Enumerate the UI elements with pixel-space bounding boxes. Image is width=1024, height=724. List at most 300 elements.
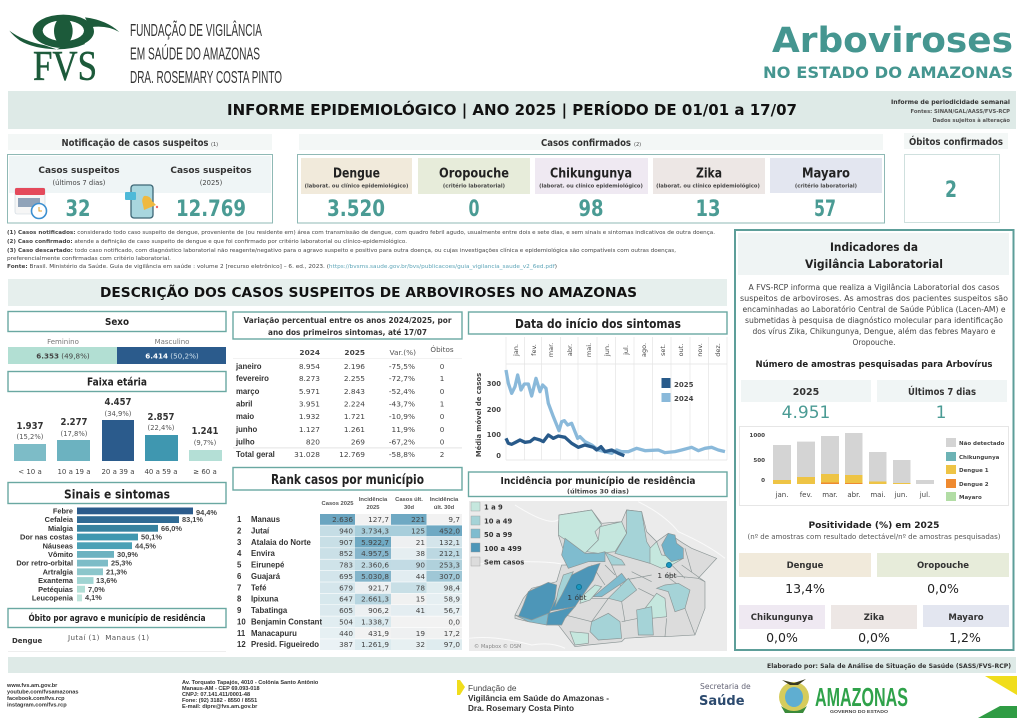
table: variação percentual: Var.(%): [389, 348, 416, 357]
table: rank casos por município: Rank casos por município: [271, 473, 424, 488]
table: variação percentual: 0: [440, 387, 445, 396]
card: Zika: [653, 158, 765, 222]
panel: notificação de casos suspeitos: (2025): [200, 179, 223, 187]
logo: FVS: FVS: [33, 44, 97, 90]
panel: sexo: Masculino: [155, 338, 189, 346]
table: variação percentual: Total geral: [236, 450, 275, 459]
panel: notificação de casos suspeitos: [8, 134, 272, 223]
kpi: amostras 2025: [741, 380, 871, 423]
table: rank casos por município: 921,7: [368, 583, 389, 592]
legend: years: 2025: [674, 381, 694, 389]
bar chart: sinais e sintomas: 30,9%: [117, 550, 138, 559]
table: variação percentual: 0: [440, 438, 445, 446]
card: Dengue: Dengue: [333, 166, 380, 182]
table: rank casos por município: 8: [237, 595, 242, 604]
footer: links: [6, 683, 78, 708]
legend: incidence: 100 a 499: [484, 545, 522, 553]
bar chart: sinais e sintomas: 83,1%: [182, 515, 203, 524]
legend: incidence: Sem casos: [484, 558, 524, 566]
footer: links: youtube.com/fvsamazonas: [7, 690, 78, 696]
kpi: positividade Zika: Zika: [864, 613, 884, 623]
chart: data do início dos sintomas: jul.: [622, 345, 630, 356]
text block: descrição: submetidas à pesquisa de diagnóstico molecular para identificação: [745, 315, 1003, 325]
panel: óbito por agravo e município: Dengue: [12, 637, 43, 645]
logo: FVS: FUNDAÇÃO DE VIGILÂNCIA: [130, 19, 262, 40]
chart: data do início dos sintomas: out.: [677, 344, 685, 356]
table: rank casos por município: Incidência: [430, 497, 459, 503]
panel: indicadores da vigilância laboratorial: [735, 230, 1014, 650]
table: variação percentual: 2.224: [344, 400, 365, 408]
bar chart: sinais e sintomas: Náuseas: [43, 541, 73, 550]
table: rank casos por município: 9,7: [448, 515, 460, 524]
bar chart: faixa etária: 2.857: [148, 412, 175, 423]
panel: indicadores da vigilância laboratorial: (nº de amostras com resultado detectável/nº de amostras pesquisadas): [748, 533, 1000, 541]
panel: notificação de casos suspeitos: (1): [211, 142, 218, 148]
kpi: positividade Mayaro: 1,2%: [949, 630, 981, 645]
panel: notificação de casos suspeitos: 12.769: [176, 197, 246, 222]
kpi: positividade Oropouche: 0,0%: [927, 581, 959, 596]
chart: data do início dos sintomas: 200: [487, 406, 501, 414]
table: rank casos por município: 132,1: [439, 538, 460, 547]
table: rank casos por município: 125: [411, 526, 425, 535]
table: rank casos por município: 907: [339, 538, 353, 547]
table: rank casos por município: 97,0: [444, 640, 460, 649]
table: rank casos por município: 1.261,9: [361, 640, 389, 649]
panel: sexo: 6.353 (49,8%): [36, 352, 90, 360]
logo: governo do amazonas: [779, 679, 908, 714]
card: Oropouche: [418, 158, 530, 222]
icon: phone with notification: [125, 185, 158, 218]
banner: informe epidemiológico: Dados sujeitos à alteração: [932, 117, 1010, 124]
logo: fundação de vigilância: Vigilância em Saúde do Amazonas -: [468, 693, 609, 703]
table: variação percentual: 11,9%: [392, 425, 415, 434]
text block: descrição: A FVS-RCP informa que realiza a Vigilância Laboratorial dos casos: [748, 283, 1000, 292]
table: rank casos por município: 58,9: [444, 595, 460, 604]
kpi: positividade Mayaro: [923, 605, 1009, 645]
kpi: amostras últimos 7 dias: Últimos 7 dias: [908, 386, 976, 398]
table: variação percentual: 2024: [299, 348, 320, 357]
table: variação percentual: -52,4%: [389, 387, 415, 396]
logo: secretaria de saúde: [699, 682, 751, 709]
table: rank casos por município: 940: [339, 526, 353, 535]
table: variação percentual: -43,7%: [389, 400, 415, 408]
chart: data do início dos sintomas: set.: [659, 344, 667, 356]
bar chart: faixa etária: (34,9%): [105, 410, 132, 418]
table: rank casos por município: 2.661,3: [361, 595, 389, 604]
table: rank casos por município: 2.636: [332, 515, 353, 524]
bar chart: faixa etária: 1.937: [16, 421, 44, 432]
table: rank casos por município: Ipixuna: [251, 595, 279, 604]
table: variação percentual: 269: [351, 438, 365, 446]
bar chart: sinais e sintomas: Exantema: [38, 576, 74, 585]
table: variação percentual: 1.261: [344, 425, 365, 434]
bar chart: sinais e sintomas: Petéquias: [38, 585, 73, 594]
table: rank casos por município: 852: [339, 549, 353, 558]
table: rank casos por município: 695: [339, 572, 353, 581]
kpi: amostras 2025: 4.951: [782, 403, 830, 423]
map: incidência por município: [468, 472, 727, 651]
chart: data do início dos sintomas: ago.: [640, 343, 648, 357]
footer: address: E-mail: dipre@fvs.am.gov.br: [182, 704, 258, 710]
table: variação percentual: -10,9%: [389, 412, 415, 421]
stacked bar chart: amostras por mês: fev.: [800, 491, 812, 499]
banner: informe epidemiológico: Informe de periodicidade semanal: [891, 100, 1010, 106]
legend: years: [662, 378, 694, 403]
stacked bar chart: amostras por mês: jul.: [919, 491, 930, 499]
table: rank casos por município: 78: [416, 583, 425, 592]
bar chart: sinais e sintomas: Vômito: [48, 550, 73, 559]
table: variação percentual: 1: [440, 400, 444, 408]
table: variação percentual: 2025: [344, 348, 365, 357]
table: rank casos por município: 12: [237, 640, 246, 649]
table: variação percentual: 8.273: [299, 374, 320, 383]
bar chart: faixa etária: (17,8%): [61, 430, 88, 438]
table: variação percentual: 2.255: [344, 374, 365, 383]
chart: data do início dos sintomas: jun.: [603, 344, 611, 357]
footer: links: www.fvs.am.gov.br: [6, 683, 58, 689]
table: variação percentual: -58,8%: [389, 450, 415, 459]
footer: links: facebook.com/fvs.rcp: [7, 696, 65, 702]
logo: governo do amazonas: AMAZONAS: [815, 682, 908, 712]
card: Zika: Zika: [696, 166, 722, 182]
table: variação percentual: 1.127: [299, 425, 320, 434]
bar chart: sinais e sintomas: [16, 506, 217, 602]
bar chart: faixa etária: < 10 a: [18, 468, 42, 476]
table: rank casos por município: últ. 30d: [434, 505, 455, 511]
bar chart: faixa etária: 2.277: [60, 417, 88, 428]
footer band: Elaborado por: Sala de Análise de Situação de Sasúde (SASS/FVS-RCP): [767, 662, 1011, 670]
table: variação percentual: janeiro: [235, 362, 262, 371]
kpi: positividade Oropouche: Oropouche: [917, 561, 969, 571]
bar chart: faixa etária: 4.457: [104, 397, 132, 408]
kpi: positividade Chikungunya: 0,0%: [766, 630, 798, 645]
table: variação percentual: março: [236, 387, 260, 396]
table: rank casos por município: 212,1: [439, 549, 460, 558]
table: variação percentual: junho: [235, 425, 257, 434]
chart: data do início dos sintomas: nov.: [696, 343, 704, 357]
heat cells: [320, 514, 462, 650]
table: rank casos por município: Manacapuru: [251, 629, 297, 638]
table: variação percentual: 1.932: [299, 412, 320, 421]
table: rank casos por município: Jutaí: [251, 526, 270, 535]
kpi: positividade Zika: [831, 605, 917, 645]
table: rank casos por município: 5.922,7: [361, 538, 389, 547]
table: variação percentual: 2.843: [344, 387, 365, 396]
panel: indicadores da vigilância laboratorial: Indicadores da: [830, 240, 918, 254]
table: variação percentual: 820: [306, 438, 320, 446]
table: rank casos por município: 5.030,8: [361, 572, 389, 581]
text block: footnotes: (1) Casos notificados: considerado todo caso suspeito de dengue, proveniente de (ou residente em) área com transmissão de dengue, com quadro febril agudo, usualmente entre dois e sete dias, e sem sinais e sintomas indicativos de outra doença.: [7, 229, 715, 236]
kpi: positividade Oropouche: [877, 553, 1009, 596]
legend: incidence: 10 a 49: [484, 518, 513, 526]
map: incidência por município: (últimos 30 dias): [567, 488, 629, 496]
legend: incidence: 50 a 99: [484, 531, 513, 539]
table: rank casos por município: 9: [237, 606, 242, 615]
table: rank casos por município: Casos últ.: [395, 497, 423, 503]
legend: resultados: Dengue 1: [959, 468, 989, 474]
chart: data do início dos sintomas: jan.: [512, 344, 520, 357]
text block: descrição: [740, 283, 1008, 347]
panel: casos confirmados: [298, 134, 884, 223]
footer: links: instagram.com/fvs.rcp: [7, 702, 67, 708]
chart: data do início dos sintomas: mai.: [585, 343, 593, 357]
stacked bar chart: amostras por mês: 1000: [749, 433, 765, 439]
table: variação percentual: -67,2%: [389, 438, 415, 446]
panel: notificação de casos suspeitos: Casos suspeitos: [38, 166, 120, 176]
text block: footnotes: (3) Caso descartado: todo caso notificado, com diagnóstico laboratorial não reagente/negativo para o agravo suspeito e positivo para outra doença, ou cujas investigações clínica e epidemiológica são compatíveis com outras doenças,: [7, 247, 676, 254]
table: rank casos por município: 504: [339, 617, 353, 626]
chart: data do início dos sintomas: 100: [487, 431, 501, 439]
table: rank casos por município: 32: [416, 640, 425, 649]
table: variação percentual: Variação percentual entre os anos 2024/2025, por: [244, 316, 452, 325]
marker: óbito Manaus: [657, 562, 677, 580]
bar chart: faixa etária: 10 a 19 a: [57, 468, 91, 476]
table: rank casos por município: 605: [339, 606, 353, 615]
bar chart: faixa etária: (9,7%): [194, 439, 217, 447]
table: rank casos por município: 647: [339, 595, 353, 604]
panel: casos confirmados: Casos confirmados: [541, 138, 631, 149]
text block: descrição: suspeitos de arboviroses. As amostras dos pacientes suspeitos são: [740, 294, 1008, 303]
table: rank casos por município: 5: [237, 560, 242, 570]
table: rank casos por município: 15: [416, 595, 425, 604]
logo: FVS: DRA. ROSEMARY COSTA PINTO: [130, 67, 282, 87]
panel: óbito por agravo e município: Óbito por agravo e município de residência: [28, 612, 206, 623]
table: rank casos por município: 221: [411, 515, 425, 524]
bar chart: sinais e sintomas: Artralgia: [43, 567, 74, 576]
bar chart: faixa etária: 1.241: [192, 426, 219, 437]
bar chart: sinais e sintomas: 44,5%: [135, 541, 156, 550]
chart: data do início dos sintomas: abr.: [566, 344, 574, 356]
table: rank casos por município: 2: [237, 526, 242, 535]
table: rank casos por município: [233, 468, 462, 650]
logo: fundação de vigilância: [457, 680, 609, 713]
bar chart: sinais e sintomas: 50,1%: [141, 533, 162, 542]
panel: casos confirmados: (2): [634, 142, 641, 148]
panel: faixa etária: Faixa etária: [87, 376, 147, 388]
table: rank casos por município: 4.957,5: [361, 549, 389, 558]
table: variação percentual: maio: [236, 412, 254, 421]
table: variação percentual: abril: [236, 400, 252, 408]
table: rank casos por município: 127,7: [368, 515, 389, 524]
panel: óbito por agravo e município: [8, 608, 226, 652]
marker: óbito Manaus: 1 óbt: [657, 571, 677, 580]
table: rank casos por município: Incidência: [359, 497, 388, 503]
table: variação percentual: Óbitos: [430, 345, 454, 354]
table: rank casos por município: Casos 2025: [322, 501, 354, 507]
stacked bar chart: amostras por mês: jun.: [893, 491, 908, 499]
title: Arboviroses: Arboviroses: [772, 21, 1013, 61]
bar chart: faixa etária: 20 a 39 a: [101, 468, 135, 476]
table: rank casos por município: 90: [416, 560, 425, 570]
table: variação percentual: fevereiro: [236, 374, 269, 383]
card: Mayaro: Mayaro: [802, 166, 850, 182]
kpi: positividade Dengue: [739, 553, 871, 596]
table: rank casos por município: Eirunepé: [251, 560, 285, 570]
table: rank casos por município: 4: [237, 549, 242, 558]
table: rank casos por município: 679: [339, 583, 353, 592]
table: rank casos por município: Presid. Figueiredo: [251, 640, 319, 649]
table: rank casos por município: 21: [416, 538, 425, 547]
chart: data do início dos sintomas: mar.: [547, 343, 555, 357]
table: rank casos por município: 431,9: [368, 629, 389, 638]
card: Oropouche: Oropouche: [439, 166, 509, 182]
stacked bar chart: amostras por mês: jan.: [775, 491, 788, 499]
legend: incidence: 1 a 9: [484, 504, 503, 512]
bar chart: faixa etária: [14, 397, 222, 476]
bar chart: sinais e sintomas: Leucopenia: [32, 594, 74, 602]
footer: address: Fone: (92) 3182 - 8550 / 8551: [182, 698, 257, 704]
panel: indicadores da vigilância laboratorial: Número de amostras pesquisadas para Arbovírus: [756, 360, 992, 370]
table: rank casos por município: 307,0: [439, 572, 460, 581]
table: rank casos por município: 783: [339, 560, 353, 570]
logo: governo do amazonas: GOVERNO DO ESTADO: [830, 709, 889, 714]
kpi: amostras 2025: 2025: [793, 387, 819, 398]
card: Chikungunya: (laborat. ou clínico epidemiológico): [539, 182, 643, 190]
stacked bar chart: amostras por mês: [740, 426, 1008, 506]
table: rank casos por município: 19: [416, 629, 425, 638]
card: Oropouche: 0: [468, 197, 480, 222]
text block: footnotes: (2) Caso confirmado: atende a definição de caso suspeito de dengue e que foi confirmado por critério laboratorial ou clínico-epidemiológico.: [7, 238, 407, 245]
kpi: positividade Mayaro: Mayaro: [948, 613, 984, 623]
panel: notificação de casos suspeitos: Casos suspeitos: [170, 166, 252, 176]
title: Arboviroses: NO ESTADO DO AMAZONAS: [763, 63, 1013, 82]
table: rank casos por município: 1.338,7: [361, 617, 389, 626]
table: variação percentual: 31.028: [294, 450, 320, 459]
bar chart: sinais e sintomas: 25,3%: [111, 559, 132, 568]
panel: sinais e sintomas: [8, 482, 226, 602]
title: Arboviroses: [763, 21, 1013, 82]
table: rank casos por município: 56,7: [444, 606, 460, 615]
chart: data do início dos sintomas: 0: [496, 452, 501, 460]
chart: data do início dos sintomas: Média móvel de casos: [475, 373, 483, 457]
decoration: corner shapes: [978, 676, 1017, 718]
bar chart: sinais e sintomas: 4,1%: [85, 593, 102, 602]
marker: óbito Jutaí: 1 óbt: [567, 593, 587, 602]
bar chart: sinais e sintomas: 66,0%: [161, 524, 182, 533]
table: rank casos por município: Tefé: [251, 583, 267, 592]
bar chart: sinais e sintomas: Dor nas costas: [20, 533, 73, 542]
panel: óbitos confirmados: 2: [945, 178, 957, 203]
panel: sexo: Feminino: [47, 338, 79, 346]
table: variação percentual: 2: [440, 450, 444, 459]
banner: informe epidemiológico: Fontes: SINAN/GAL/AASS/FVS-RCP: [910, 109, 1010, 115]
card: Zika: (laborat. ou clínico epidemiológico): [656, 182, 760, 190]
footer band: [8, 657, 1016, 673]
table: variação percentual: 12.769: [339, 450, 365, 459]
bar chart: faixa etária: (15,2%): [17, 433, 44, 441]
table: variação percentual: 2.196: [344, 362, 365, 371]
table: rank casos por município: 2025: [367, 505, 380, 511]
text block: descrição: encaminhadas ao Laboratório Central de Saúde Pública (Lacen-AM) e: [742, 304, 1006, 314]
heading: descrição dos casos suspeitos: DESCRIÇÃO DOS CASOS SUSPEITOS DE ARBOVIROSES NO AMAZONAS: [100, 284, 637, 301]
card: Oropouche: (critério laboratorial): [443, 182, 505, 190]
text block: footnotes: Fonte: Brasil. Ministério da Saúde. Guia de vigilância em saúde : volume 2 [recurso eletrônico] – 6. ed., 2023. ( https://bvsms.saude.gov.br/bvs/publicacoes/guia_vigilancia_saude_v2_6ed.pdf ): [7, 263, 557, 270]
table: variação percentual: -75,5%: [389, 362, 415, 371]
table: rank casos por município: 3.734,3: [361, 526, 389, 535]
logo: fundação de vigilância: Dra. Rosemary Costa Pinto: [468, 703, 574, 713]
chart: data do início dos sintomas: [468, 312, 727, 460]
heading: descrição dos casos suspeitos: [8, 279, 727, 306]
table: rank casos por município: 2.360,6: [361, 560, 389, 570]
stacked bar chart: amostras por mês: 500: [753, 458, 765, 464]
stacked bar chart: amostras por mês: 0: [761, 478, 765, 484]
chart: data do início dos sintomas: fev.: [530, 344, 538, 356]
table: rank casos por município: 10: [237, 617, 246, 626]
banner: informe epidemiológico: INFORME EPIDEMIOLÓGICO | ANO 2025 | PERÍODO DE 01/01 a 17/07: [227, 100, 797, 120]
footer: address: Manaus-AM - CEP 69.093-018: [182, 686, 260, 692]
panel: notificação de casos suspeitos: Notificação de casos suspeitos: [62, 138, 209, 149]
table: rank casos por município: Benjamin Constant: [251, 617, 322, 626]
table: rank casos por município: 440: [339, 629, 353, 638]
kpi: positividade Chikungunya: [739, 605, 825, 645]
table: rank casos por município: Guajará: [251, 572, 281, 581]
panel: sexo: Sexo: [105, 317, 129, 328]
table: rank casos por município: Tabatinga: [251, 606, 288, 615]
legend: resultados: Não detectado: [959, 441, 1005, 447]
panel: sinais e sintomas: Sinais e sintomas: [64, 488, 170, 502]
card: Mayaro: [770, 158, 882, 222]
table: rank casos por município: 11: [237, 629, 246, 638]
panel: sexo: 6.414 (50,2%): [145, 352, 199, 360]
logo: secretaria de saúde: Saúde: [699, 694, 745, 709]
kpi: positividade Dengue: Dengue: [787, 561, 824, 571]
panel: sexo: [8, 312, 226, 364]
bar chart: sinais e sintomas: 21,3%: [106, 567, 127, 576]
table: rank casos por município: 38: [416, 549, 425, 558]
bar chart: faixa etária: (22,4%): [148, 424, 175, 432]
table: rank casos por município: Atalaia do Norte: [251, 538, 311, 547]
bar chart: sinais e sintomas: Cefaleia: [45, 515, 74, 524]
table: rank casos por município: 3: [237, 538, 242, 547]
logo: FVS: [9, 15, 282, 90]
panel: notificação de casos suspeitos: (últimos 7 dias): [53, 179, 106, 187]
table: rank casos por município: 0,0: [448, 617, 460, 626]
table: variação percentual: 0: [440, 412, 445, 421]
logo: fundação de vigilância: Fundação de: [468, 683, 517, 693]
table: variação percentual: 1: [440, 374, 444, 383]
table: rank casos por município: 1: [237, 515, 242, 524]
card: Dengue: [301, 158, 412, 222]
bar chart: sinais e sintomas: 13,6%: [96, 576, 117, 585]
legend: resultados: Dengue 2: [959, 482, 989, 488]
table: rank casos por município: 30d: [404, 505, 414, 511]
logo: FVS: EM SAÚDE DO AMAZONAS: [130, 42, 260, 64]
legend: incidence: [471, 502, 524, 566]
table: rank casos por município: Manaus: [251, 515, 281, 524]
table: variação percentual: ano dos primeiros sintomas, até 17/07: [268, 327, 427, 337]
table: rank casos por município: 906,2: [368, 606, 389, 615]
table: rank casos por município: 41: [416, 606, 425, 615]
card: Zika: 13: [696, 197, 720, 222]
table: rank casos por município: 7: [237, 583, 241, 592]
table: variação percentual: [233, 312, 462, 459]
kpi: positividade Zika: 0,0%: [858, 630, 890, 645]
panel: indicadores da vigilância laboratorial: Positividade (%) em 2025: [808, 521, 940, 531]
table: rank casos por município: 253,3: [439, 560, 460, 570]
panel: óbitos confirmados: Óbitos confirmados: [909, 136, 1003, 148]
bar chart: faixa etária: ≥ 60 a: [193, 468, 217, 476]
panel: óbitos confirmados: [904, 133, 1008, 222]
kpi: positividade Dengue: 13,4%: [785, 581, 825, 596]
table: rank casos por município: 452,0: [439, 526, 460, 535]
legend: resultados: Chikungunya: [959, 455, 1000, 461]
card: Chikungunya: [535, 158, 648, 222]
line: 2025: [506, 435, 624, 456]
panel: notificação de casos suspeitos: 32: [66, 197, 90, 222]
stacked bar chart: amostras por mês: mai.: [870, 491, 886, 499]
chart: data do início dos sintomas: dez.: [714, 343, 722, 357]
banner: informe epidemiológico: [8, 91, 1016, 129]
